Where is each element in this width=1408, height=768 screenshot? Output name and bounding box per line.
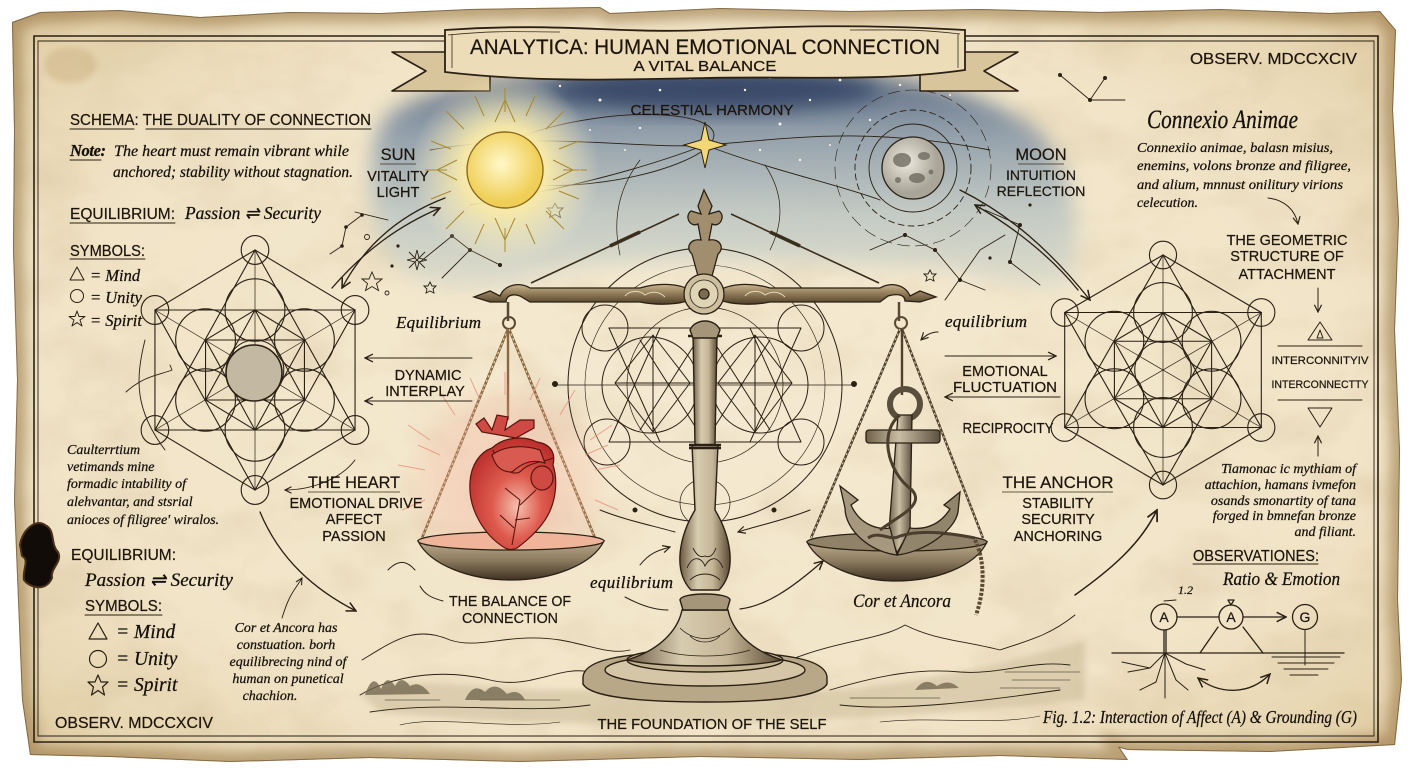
moon [882, 137, 944, 199]
heart label: THE HEART [308, 473, 400, 492]
moon label: MOON [1015, 146, 1067, 164]
observationes heading: Ratio & Emotion [1222, 569, 1340, 590]
moon label: REFLECTION [997, 183, 1085, 199]
observ label top right: OBSERV. MDCCXCIV [1190, 51, 1357, 68]
cor et ancora script: Cor et Ancora [853, 591, 951, 612]
centre sacred geometry [552, 248, 856, 532]
connexio paragraph: and alium, mnnust onilitury virions [1137, 178, 1344, 193]
observ label bottom left: OBSERV. MDCCXCIV [55, 715, 214, 732]
figure caption: Fig. 1.2: Interaction of Affect (A) & Grounding (G) [1042, 707, 1357, 728]
emotional fluctuation label: FLUCTUATION [953, 380, 1057, 396]
banner title: ANALYTICA: HUMAN EMOTIONAL CONNECTION [470, 35, 940, 59]
centre star [684, 122, 726, 168]
celestial harmony label: CELESTIAL HARMONY [630, 102, 794, 119]
heart label: AFFECT [326, 512, 382, 528]
figure 1.2 diagram [1112, 583, 1344, 698]
sky band: celestial harmony backdrop [371, 68, 1077, 288]
symbols legend top: = Unity [90, 288, 143, 307]
balance of connection label [388, 562, 571, 627]
anchor label: THE ANCHOR [1002, 473, 1114, 492]
left paragraph: alehvantar, and stsrial [67, 495, 193, 510]
equilibrium right script: equilibrium [945, 312, 1027, 331]
balance of connection label: THE BALANCE OF [449, 594, 571, 610]
symbols legend top [69, 243, 145, 330]
equilibrium lower script: equilibrium [590, 573, 673, 592]
anchor [840, 389, 975, 555]
equilibrium formula top: EQUILIBRIUM: [70, 206, 175, 223]
equilibrium formula top: Passion ⇌ Security [184, 203, 321, 223]
equilibrium formula lower: Passion ⇌ Security [84, 570, 234, 591]
balance of connection label: CONNECTION [462, 611, 558, 627]
lower left latin paragraph: equilibrecing nind of [230, 655, 349, 670]
geometric structure label: STRUCTURE OF [1230, 249, 1344, 265]
banner subtitle: A VITAL BALANCE [634, 58, 776, 75]
tramonac paragraph: attachion, hamans ivmefon [1205, 478, 1356, 493]
left sacred geometry cube [126, 236, 369, 504]
figure 1.2 diagram: A [1226, 609, 1236, 625]
burn hole [20, 523, 59, 587]
left paragraph: anioces of filigree' wiralos. [67, 513, 219, 528]
interconnectivity emblem: INTERCONNITYIV [1272, 355, 1369, 367]
dynamic interplay label: INTERPLAY [385, 384, 465, 400]
interconnectivity emblem [1272, 322, 1369, 456]
schema heading: SCHEMA: THE DUALITY OF CONNECTION [70, 112, 371, 129]
schema note [69, 141, 353, 181]
observationes heading [1193, 548, 1340, 590]
connexio paragraph: celecution. [1137, 196, 1198, 211]
observationes heading: OBSERVATIONES: [1193, 548, 1319, 565]
lower left latin paragraph: human on punetical [232, 672, 344, 687]
geometric structure label [1227, 233, 1347, 312]
reciprocity label: RECIPROCITY [962, 421, 1054, 437]
symbols legend lower: = Unity [116, 649, 178, 670]
geometric structure label: THE GEOMETRIC [1227, 233, 1347, 249]
left hanger and ropes [422, 302, 595, 538]
equilibrium left script: Equilibrium [395, 313, 481, 332]
symbols legend lower: = Spirit [116, 675, 178, 696]
scale struts [531, 214, 879, 283]
scale base [583, 321, 827, 702]
symbols legend top: SYMBOLS: [70, 243, 145, 260]
balance scale [398, 190, 987, 702]
figure 1.2 diagram: G [1300, 609, 1310, 625]
schema note: Note: [69, 141, 106, 160]
anchor label: ANCHORING [1014, 529, 1102, 545]
left paragraph: Caulterrtium [67, 443, 140, 458]
sun label: LIGHT [377, 185, 419, 201]
lower left latin paragraph: chachion. [243, 689, 297, 704]
schema note: anchored; stability without stagnation. [113, 164, 353, 181]
figure 1.2 diagram: A [1159, 609, 1169, 625]
symbols legend top: = Mind [90, 266, 141, 285]
interconnectivity emblem: INTERCONNECTTY [1272, 379, 1369, 391]
heart [470, 415, 556, 550]
equilibrium right script [921, 312, 1027, 340]
heart label [290, 473, 423, 545]
lower left latin paragraph: constuation. borh [237, 638, 335, 653]
sun [410, 75, 600, 265]
equilibrium formula lower: EQUILIBRIUM: [71, 547, 176, 564]
tramonac paragraph: and filiant. [1295, 525, 1356, 540]
cor et ancora script [740, 561, 951, 612]
celestial star field and constellations [330, 71, 1125, 300]
anchor label: SECURITY [1021, 512, 1095, 528]
moon label: INTUITION [1006, 167, 1076, 183]
left paragraph: formadic intability of [67, 477, 188, 492]
dynamic interplay label [365, 358, 472, 401]
tramonac paragraph [1205, 462, 1358, 540]
dynamic interplay label: DYNAMIC [395, 368, 461, 384]
anchor label: STABILITY [1022, 496, 1094, 512]
tramonac paragraph: osands smonartity of tana [1211, 494, 1356, 509]
connexio paragraph: enemins, volons bronze and filigree, [1137, 159, 1351, 174]
geometric structure label: ATTACHMENT [1239, 267, 1336, 283]
right hanger and ropes [811, 302, 983, 538]
finial [688, 190, 722, 276]
connexio paragraph [1137, 141, 1351, 211]
emotional fluctuation label: EMOTIONAL [962, 364, 1048, 380]
symbols legend top: = Spirit [90, 311, 142, 330]
left pan [418, 532, 604, 580]
sun label: VITALITY [367, 169, 429, 185]
hanging rope [975, 540, 983, 615]
anchor label [1002, 473, 1114, 545]
left paragraph [67, 443, 219, 528]
symbols legend lower [85, 598, 178, 696]
right pan [807, 533, 987, 581]
banner ribbon with title [392, 26, 1018, 91]
foundation label: THE FOUNDATION OF THE SELF [598, 716, 826, 733]
schema note: The heart must remain vibrant while [114, 143, 349, 160]
tramonac paragraph: forged in bmnefan bronze [1213, 509, 1356, 524]
connexio heading: Connexio Animae [1147, 105, 1298, 134]
equilibrium formula top [70, 203, 321, 223]
heart label: PASSION [322, 529, 386, 545]
connector arrow from paragraph [1268, 198, 1298, 224]
right sacred geometry cube [1051, 241, 1275, 499]
equilibrium lower script [590, 547, 673, 610]
symbols legend lower: = Mind [116, 622, 175, 643]
equilibrium formula lower [71, 547, 234, 591]
connexio paragraph: Connexiio animae, balasn misius, [1137, 141, 1333, 156]
emotional fluctuation label [945, 356, 1060, 397]
heart label: EMOTIONAL DRIVE [290, 496, 423, 512]
lower left latin paragraph: Cor et Ancora has [235, 621, 338, 636]
sun label: SUN [381, 146, 415, 164]
landscape [360, 615, 1085, 725]
moon label [997, 146, 1085, 199]
tramonac paragraph: Tiamonac ic mythiam of [1221, 462, 1358, 477]
symbols legend lower: SYMBOLS: [85, 598, 162, 615]
left paragraph: vetimands mine [67, 460, 154, 475]
lower left latin paragraph [230, 621, 349, 704]
beam [474, 274, 936, 314]
sun label [367, 146, 429, 201]
large curved arrows [260, 190, 1157, 618]
heart glow [398, 372, 620, 590]
figure 1.2 diagram: 1.2 [1178, 583, 1193, 597]
